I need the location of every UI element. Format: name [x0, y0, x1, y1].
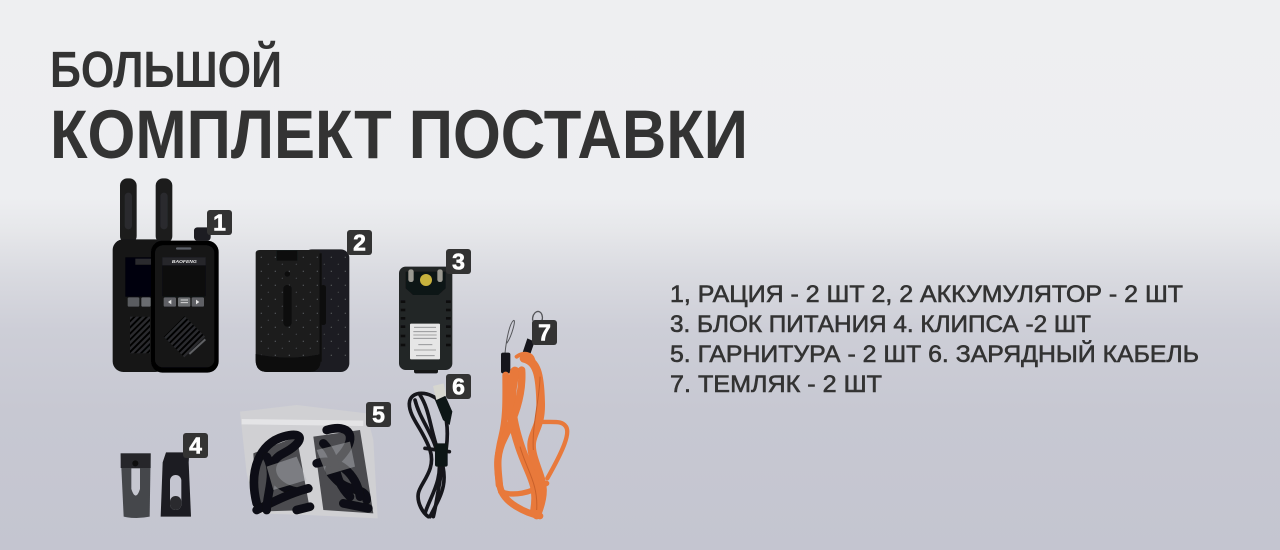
lanyard cords — [501, 311, 542, 394]
badge 7 — [532, 320, 557, 346]
item 7: orange lanyards — [498, 311, 567, 516]
item 4: belt clips — [121, 452, 191, 518]
badge 5: 5 — [372, 402, 385, 428]
badge 6 — [446, 374, 471, 400]
item 2: two batteries — [256, 249, 349, 372]
clip: black — [161, 452, 191, 517]
front radio — [151, 178, 219, 373]
contents list — [670, 281, 1199, 398]
list line 2: 3. БЛОК ПИТАНИЯ 4. КЛИПСА -2 ШТ — [670, 311, 1091, 338]
lanyard ribbons — [498, 354, 567, 516]
rear radio — [113, 178, 166, 372]
badge 4: 4 — [189, 432, 202, 458]
list line 4: 7. ТЕМЛЯК - 2 ШТ — [670, 371, 882, 398]
heading line: large: КОМПЛЕКТ ПОСТАВКИ — [50, 96, 748, 173]
badge 3 — [446, 248, 471, 274]
item 5: headset in plastic bag — [240, 405, 378, 518]
badge 2: 2 — [353, 230, 366, 256]
adapter label — [410, 324, 440, 359]
list line 3: 5. ГАРНИТУРА - 2 ШТ 6. ЗАРЯДНЫЙ КАБЕЛЬ — [670, 340, 1199, 368]
badge 2 — [347, 230, 372, 256]
badge 6: 6 — [452, 374, 465, 400]
item 1: two radios — [113, 178, 219, 373]
badge 7: 7 — [538, 320, 551, 346]
badge 1: 1 — [213, 210, 226, 236]
item 6: charging cable — [409, 383, 452, 517]
badge 5 — [366, 402, 391, 428]
heading — [50, 40, 748, 173]
front radio: BAOFENG — [172, 259, 197, 265]
badge 3: 3 — [452, 248, 465, 274]
badge 4 — [183, 432, 208, 458]
rear battery — [303, 249, 349, 372]
front battery — [256, 250, 321, 372]
badge 1 — [207, 210, 232, 236]
list line 1: 1, РАЦИЯ - 2 ШТ 2, 2 АККУМУЛЯТОР - 2 ШТ — [670, 281, 1183, 308]
item 3: power adapter — [399, 267, 452, 373]
heading line: small: БОЛЬШОЙ — [50, 40, 282, 98]
clip: metal — [121, 453, 151, 518]
